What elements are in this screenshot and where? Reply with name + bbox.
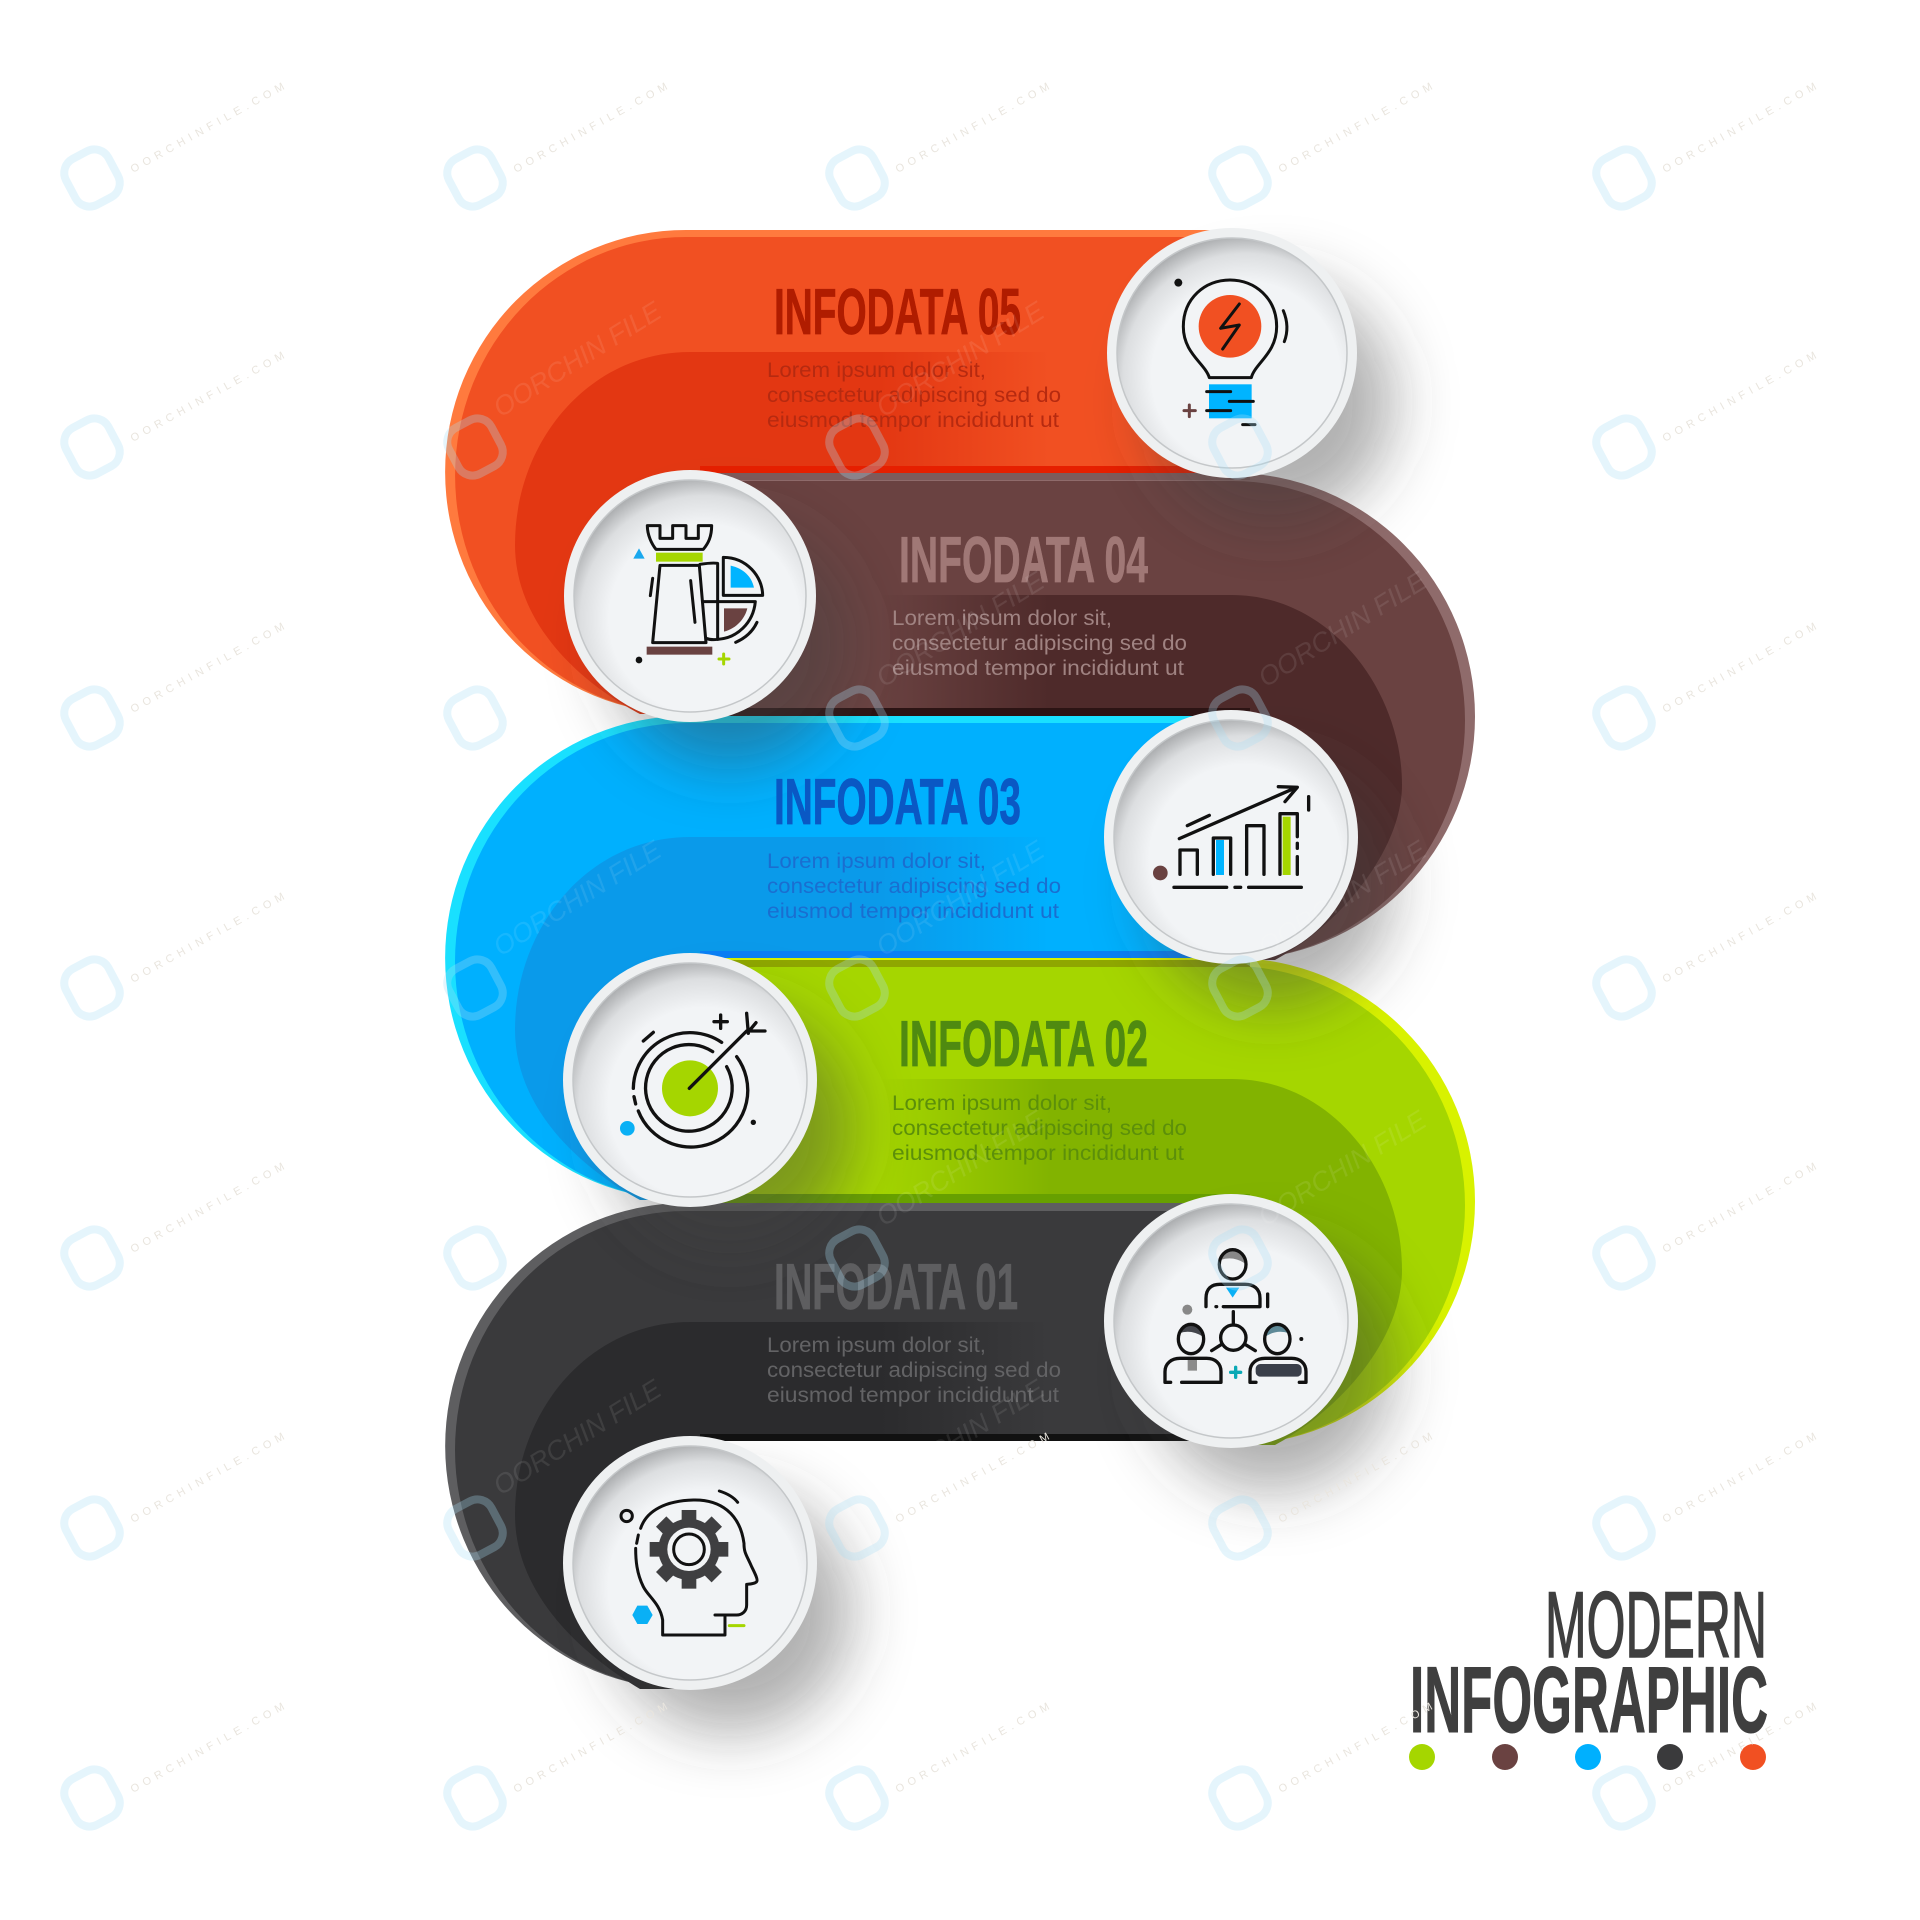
title	[1410, 1572, 1768, 1752]
watermark small text: OORCHINFILE.COM	[894, 1698, 1056, 1796]
text block: infodata 04: INFODATA 04	[899, 523, 1148, 596]
text block: infodata 02	[892, 1007, 1187, 1165]
text block: infodata 04: Lorem ipsum dolor sit,	[892, 607, 1112, 630]
watermark large diagonal text	[488, 295, 1432, 1501]
text block: infodata 03	[767, 765, 1061, 923]
panel: band 02 green	[690, 958, 1475, 1445]
panel: band 03 blue	[445, 716, 1232, 1200]
icon: team hierarchy	[1165, 1250, 1306, 1382]
watermark small text: OORCHINFILE.COM	[894, 1428, 1056, 1526]
badge: light bulb	[1107, 228, 1357, 478]
watermark large diagonal text: OORCHIN FILE	[871, 565, 1050, 693]
watermark small text: OORCHINFILE.COM	[129, 1428, 291, 1526]
watermark large diagonal text: OORCHIN FILE	[488, 295, 667, 423]
text block: infodata 02: Lorem ipsum dolor sit,	[892, 1092, 1112, 1115]
watermark large diagonal text: OORCHIN FILE	[488, 834, 667, 962]
text block: infodata 03: Lorem ipsum dolor sit,	[767, 850, 986, 873]
badge: growth chart	[1104, 710, 1358, 964]
text block: infodata 02: consectetur adipiscing sed do	[892, 1117, 1187, 1140]
watermark large diagonal text: OORCHIN FILE	[871, 834, 1050, 962]
text block: infodata 01: INFODATA 01	[774, 1250, 1018, 1323]
watermark small text: OORCHINFILE.COM	[1661, 347, 1823, 445]
text block: infodata 04: eiusmod tempor incididunt ut	[892, 657, 1184, 680]
watermark small text: OORCHINFILE.COM	[894, 78, 1056, 176]
watermark large diagonal text: OORCHIN FILE	[488, 1373, 667, 1501]
watermark logos	[59, 144, 1657, 1832]
watermark small text: OORCHINFILE.COM	[129, 78, 291, 176]
watermark small text: OORCHINFILE.COM	[129, 347, 291, 445]
text block: infodata 05: consectetur adipiscing sed do	[767, 384, 1061, 407]
watermark large diagonal text: OORCHIN FILE	[871, 295, 1050, 423]
badge: rook and pie chart	[564, 470, 816, 722]
watermark large diagonal text: OORCHIN FILE	[1253, 1104, 1432, 1232]
watermark small text: OORCHINFILE.COM	[1277, 1698, 1439, 1796]
text block: infodata 03: consectetur adipiscing sed do	[767, 875, 1061, 898]
watermark small text: OORCHINFILE.COM	[129, 888, 291, 986]
badge: target	[563, 953, 817, 1207]
text block: infodata 01	[767, 1250, 1061, 1407]
badge: team	[1104, 1194, 1358, 1448]
text block: infodata 05	[767, 275, 1061, 432]
watermark small text: OORCHINFILE.COM	[129, 1698, 291, 1796]
text block: infodata 02: INFODATA 02	[899, 1007, 1148, 1080]
watermark small text: OORCHINFILE.COM	[1661, 618, 1823, 716]
watermark large diagonal text: OORCHIN FILE	[871, 1104, 1050, 1232]
panel: band 04 brown	[690, 473, 1475, 960]
watermark large diagonal text: OORCHIN FILE	[871, 1373, 1050, 1501]
legend dots	[1409, 1744, 1766, 1770]
watermark small text: OORCHINFILE.COM	[129, 618, 291, 716]
icon: rook and pie chart	[633, 526, 763, 664]
text block: infodata 04: consectetur adipiscing sed do	[892, 632, 1187, 655]
text block: infodata 02: eiusmod tempor incididunt ut	[892, 1142, 1184, 1165]
watermark small text: OORCHINFILE.COM	[1661, 78, 1823, 176]
watermark large diagonal text: OORCHIN FILE	[1253, 834, 1432, 962]
text block: infodata 05: eiusmod tempor incididunt ut	[767, 409, 1059, 432]
icon: head with gear	[621, 1491, 757, 1635]
watermark small text: OORCHINFILE.COM	[1277, 78, 1439, 176]
icon: light bulb	[1174, 279, 1287, 425]
text block: infodata 01: Lorem ipsum dolor sit,	[767, 1334, 986, 1357]
watermark small text: OORCHINFILE.COM	[1661, 1698, 1823, 1796]
circle drop shadows	[608, 280, 1394, 1733]
watermark small text: OORCHINFILE.COM	[1661, 1158, 1823, 1256]
panel: band 05 orange	[445, 230, 1232, 714]
watermark small text: OORCHINFILE.COM	[1661, 888, 1823, 986]
panel: band 01 dark grey	[445, 1203, 1232, 1689]
text block: infodata 04	[892, 523, 1187, 680]
text block: infodata 01: consectetur adipiscing sed do	[767, 1359, 1061, 1382]
watermark small text: OORCHINFILE.COM	[512, 1698, 674, 1796]
watermark small text: OORCHINFILE.COM	[512, 78, 674, 176]
text block: infodata 05: INFODATA 05	[774, 275, 1021, 348]
text block: infodata 03: eiusmod tempor incididunt ut	[767, 900, 1059, 923]
watermark large diagonal text: OORCHIN FILE	[1253, 565, 1432, 693]
watermark small text: OORCHINFILE.COM	[1661, 1428, 1823, 1526]
watermark small text: OORCHINFILE.COM	[1277, 1428, 1439, 1526]
text block: infodata 05: Lorem ipsum dolor sit,	[767, 359, 986, 382]
badge: head with gear	[563, 1436, 817, 1690]
watermark small text	[129, 78, 1823, 1796]
icon: target with arrow	[620, 1013, 765, 1147]
text block: infodata 01: eiusmod tempor incididunt ut	[767, 1384, 1059, 1407]
watermark small text: OORCHINFILE.COM	[129, 1158, 291, 1256]
text block: infodata 03: INFODATA 03	[774, 765, 1021, 838]
icon: growth chart	[1153, 787, 1309, 887]
